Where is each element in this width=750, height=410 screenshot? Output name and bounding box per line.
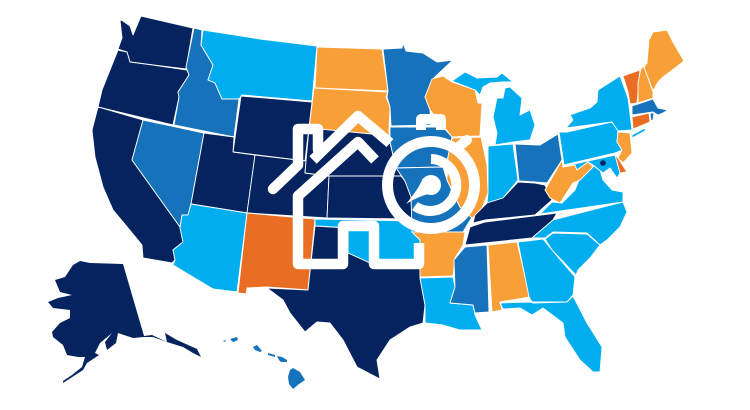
- state: Kansas: [327, 176, 412, 219]
- state: Oklahoma: [315, 219, 420, 268]
- state: Delaware: [615, 155, 627, 173]
- state: Vermont: [623, 70, 640, 104]
- state: Texas: [267, 226, 425, 379]
- state: New Hampshire: [638, 67, 653, 103]
- state: Idaho: [174, 28, 239, 137]
- state: Long Island: [632, 128, 645, 138]
- state: Washington: [118, 16, 193, 69]
- state: Iowa: [390, 127, 452, 168]
- state: Alabama: [488, 242, 530, 312]
- state: New Mexico: [238, 213, 315, 294]
- state: West Virginia: [545, 160, 593, 203]
- state: North Carolina: [532, 202, 627, 245]
- state: New York: [566, 76, 632, 131]
- state: Virginia: [540, 165, 623, 214]
- dot: Washington DC: [600, 160, 606, 166]
- state: Illinois: [447, 137, 488, 218]
- state: Maryland: [565, 155, 620, 178]
- house walls, door and lower roof: [298, 142, 419, 264]
- state: Maine: [644, 30, 684, 91]
- state: Hawaii: [223, 337, 305, 389]
- house upper roof line: [313, 116, 390, 160]
- state: Louisiana: [420, 277, 482, 330]
- state: Tennessee: [465, 213, 557, 245]
- state: New Jersey: [617, 132, 632, 163]
- state: Kentucky: [473, 182, 552, 223]
- state: Arizona: [173, 204, 247, 292]
- state: Nevada: [132, 120, 204, 227]
- state: Georgia: [518, 239, 575, 302]
- state: Wisconsin: [425, 76, 482, 137]
- stopwatch side button: [456, 140, 467, 149]
- state: South Carolina: [545, 233, 600, 275]
- state: North Dakota: [315, 47, 388, 91]
- state: Arkansas: [412, 232, 465, 277]
- state: Minnesota: [383, 43, 453, 126]
- state: Nebraska: [305, 128, 402, 177]
- state: Wyoming: [233, 96, 312, 161]
- state: Ohio: [515, 134, 562, 183]
- state: Pennsylvania: [559, 122, 622, 165]
- state: Montana: [201, 30, 317, 101]
- state: Colorado: [247, 155, 329, 218]
- stopwatch ring: [388, 142, 474, 228]
- map of the United States: [48, 16, 684, 389]
- state: Connecticut: [632, 113, 650, 129]
- state: Mississippi: [450, 245, 489, 313]
- stopwatch inner progress arc: [415, 159, 456, 211]
- state: South Dakota: [309, 88, 390, 143]
- state: Indiana: [487, 144, 518, 203]
- state: California: [92, 107, 183, 263]
- state: Alaska: [48, 261, 201, 383]
- state: Rhode Island: [650, 113, 654, 121]
- state: Missouri: [396, 167, 472, 232]
- house outer roof and chimney: [273, 129, 318, 189]
- state: Michigan upper peninsula: [452, 72, 513, 95]
- stopwatch needle: [406, 175, 441, 204]
- state: Florida: [500, 296, 602, 372]
- state: Massachusetts: [632, 99, 668, 115]
- icon: stopwatch: [388, 119, 474, 228]
- stopwatch crown: [421, 119, 441, 130]
- icon: house with chimney: [273, 116, 419, 264]
- state: Utah: [191, 133, 255, 213]
- state: Oregon: [98, 50, 189, 125]
- state: Michigan lower peninsula: [493, 87, 535, 145]
